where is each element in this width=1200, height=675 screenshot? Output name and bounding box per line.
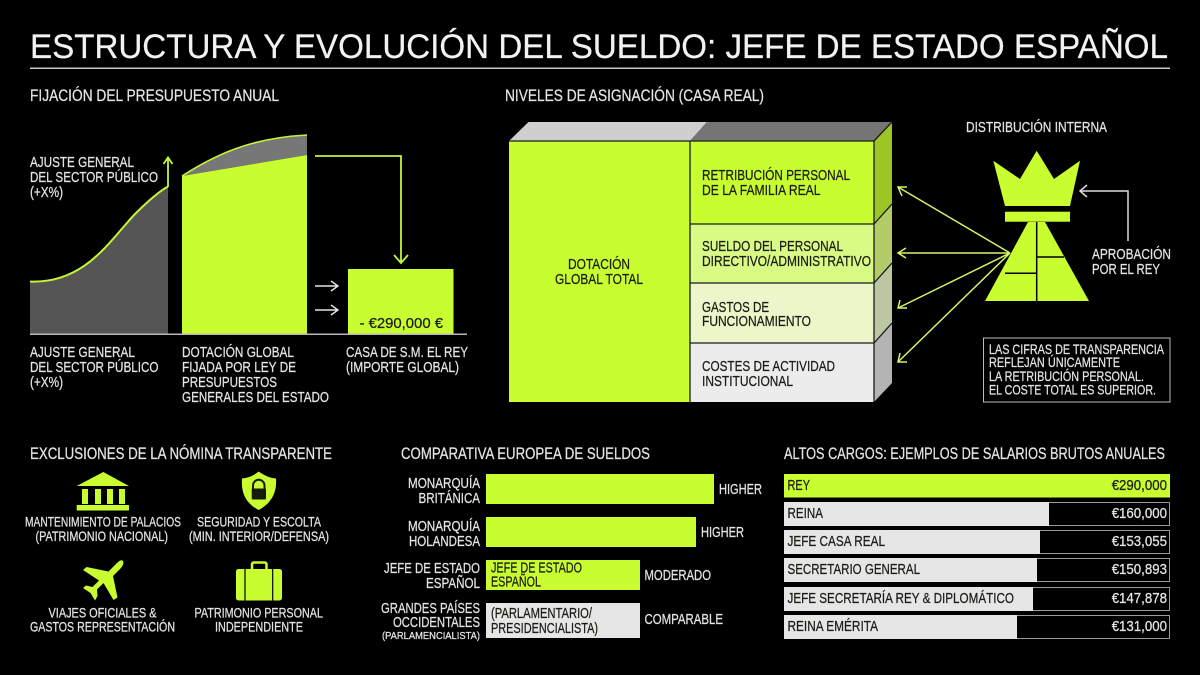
- label: ajuste general upper: DEL SECTOR PÚBLICO: [30, 169, 158, 186]
- row: jefe de estado español: JEFE DE ESTADO: [384, 560, 480, 577]
- row: monarquía británica: MONARQUÍA: [408, 475, 480, 492]
- row: grandes países occidentales: (PARLAMENTARIO/: [491, 605, 593, 622]
- block label: sueldo del personal: SUELDO DEL PERSONAL: [702, 238, 843, 255]
- label: viajes oficiales: GASTOS REPRESENTACIÓN: [30, 619, 175, 635]
- row: jefe secretaría rey: JEFE SECRETARÍA REY & DIPLOMÁTICO: [788, 590, 1014, 607]
- heading: fijación del presupuesto: FIJACIÓN DEL PRESUPUESTO ANUAL: [30, 86, 279, 105]
- block label: retribución personal: DE LA FAMILIA REAL: [702, 182, 820, 199]
- label: seguridad y escolta: SEGURIDAD Y ESCOLTA: [197, 514, 321, 530]
- row: monarquía británica: HIGHER: [719, 481, 762, 498]
- callout: transparency note: REFLEJAN ÚNICAMENTE: [989, 354, 1120, 370]
- 3d block: [509, 122, 892, 402]
- row: monarquía holandesa: HOLANDESA: [409, 533, 480, 550]
- row: jefe secretaría rey: [784, 587, 1170, 611]
- label: ajuste general lower: AJUSTE GENERAL: [30, 344, 135, 361]
- row: reina emérita: €131,000: [1112, 618, 1167, 635]
- row: monarquía holandesa: [408, 517, 744, 550]
- row: monarquía holandesa: MONARQUÍA: [408, 518, 480, 535]
- callout: transparency note: LA RETRIBUCIÓN PERSONAL.: [989, 368, 1144, 384]
- block label: gastos de funcionamiento: FUNCIONAMIENTO: [702, 313, 811, 330]
- block label: sueldo del personal: DIRECTIVO/ADMINISTRATIVO: [702, 253, 871, 270]
- row: reina: [784, 502, 1170, 526]
- label: patrimonio personal: [194, 605, 323, 635]
- label: dotación global: [182, 344, 329, 406]
- row: grandes países occidentales: PRESIDENCIALISTA): [491, 620, 598, 637]
- label: dotación global: PRESUPUESTOS: [182, 374, 277, 391]
- label: ajuste general upper: [30, 154, 158, 201]
- row: jefe secretaría rey: €147,878: [1112, 590, 1167, 607]
- row: jefe de estado español: JEFE DE ESTADO: [491, 560, 582, 577]
- block label: dotación global total: GLOBAL TOTAL: [555, 271, 643, 288]
- label: casa de s.m. el rey: CASA DE S.M. EL REY: [346, 344, 468, 361]
- block label: retribución personal: [702, 167, 850, 199]
- icon: shield with lock: [242, 472, 276, 510]
- row: jefe casa real: €153,055: [1112, 533, 1167, 550]
- row: reina emérita: REINA EMÉRITA: [788, 618, 878, 635]
- row: secretario general: SECRETARIO GENERAL: [788, 561, 920, 578]
- panel: niveles de asignación: [505, 86, 1171, 402]
- label: mantenimiento de palacios: (PATRIMONIO NACIONAL): [36, 528, 168, 544]
- heading: comparativa europea: COMPARATIVA EUROPEA DE SUELDOS: [401, 445, 650, 463]
- label: casa de s.m. el rey: [346, 344, 468, 376]
- row: grandes países occidentales: (PARLAMENCIALISTA): [382, 630, 480, 642]
- block label: dotación global total: [555, 256, 643, 288]
- label: ajuste general lower: DEL SECTOR PÚBLICO: [30, 359, 158, 376]
- row: secretario general: €150,893: [1112, 561, 1167, 578]
- row: rey: REY: [788, 477, 810, 494]
- row: reina emérita: [784, 615, 1170, 639]
- callout: transparency note: [984, 338, 1170, 402]
- label: seguridad y escolta: [189, 514, 329, 544]
- baseline: [30, 334, 467, 335]
- chart: dotación global bar: [182, 135, 307, 334]
- label: casa de s.m. el rey: (IMPORTE GLOBAL): [346, 359, 459, 376]
- panel: altos cargos: [784, 445, 1170, 639]
- panel: exclusiones: [25, 444, 332, 635]
- label: mantenimiento de palacios: MANTENIMIENTO DE PALACIOS: [25, 514, 181, 530]
- heading: niveles de asignación: NIVELES DE ASIGNACIÓN (CASA REAL): [505, 86, 764, 105]
- block label: costes de actividad: INSTITUCIONAL: [702, 373, 793, 390]
- label: patrimonio personal: INDEPENDIENTE: [215, 619, 303, 635]
- label: distribución interna: DISTRIBUCIÓN INTERNA: [966, 119, 1107, 136]
- block label: gastos de funcionamiento: GASTOS DE: [702, 299, 769, 316]
- label: aprobación por el rey: APROBACIÓN: [1092, 246, 1171, 263]
- label: patrimonio personal: PATRIMONIO PERSONAL: [194, 605, 323, 621]
- row: jefe de estado español: MODERADO: [644, 567, 711, 584]
- block label: costes de actividad: [702, 358, 835, 390]
- row: grandes países occidentales: COMPARABLE: [644, 611, 723, 628]
- label: ajuste general upper: AJUSTE GENERAL: [30, 154, 134, 171]
- row: grandes países occidentales: OCCIDENTALES: [393, 614, 480, 631]
- row: jefe de estado español: ESPAÑOL: [491, 574, 541, 591]
- label: aprobación por el rey: [1092, 246, 1171, 278]
- label: aprobación por el rey: POR EL REY: [1092, 261, 1160, 278]
- row: grandes países occidentales: GRANDES PAÍSES: [381, 600, 480, 617]
- arrows: white pair: [315, 281, 338, 315]
- label: seguridad y escolta: (MIN. INTERIOR/DEFENSA): [189, 528, 329, 544]
- label: mantenimiento de palacios: [25, 514, 181, 544]
- row: jefe de estado español: ESPAÑOL: [426, 575, 480, 592]
- row: reina: €160,000: [1112, 505, 1167, 522]
- label: ajuste general lower: (+X%): [30, 374, 63, 391]
- title: ESTRUCTURA Y EVOLUCIÓN DEL SUELDO: JEFE DE ESTADO ESPAÑOL: [30, 27, 1168, 66]
- row: jefe de estado español: [384, 560, 711, 592]
- row: jefe casa real: [784, 530, 1170, 554]
- block label: gastos de funcionamiento: [702, 299, 811, 330]
- row: rey: €290,000: [1112, 477, 1167, 494]
- casa real box: - €290,000 €: [360, 315, 444, 332]
- label: viajes oficiales: VIAJES OFICIALES &: [48, 605, 157, 621]
- row: grandes países occidentales: [381, 600, 723, 642]
- panel: comparativa europea: [381, 445, 762, 642]
- row: monarquía británica: [408, 474, 762, 507]
- row: monarquía holandesa: HIGHER: [701, 524, 744, 541]
- arrows: distribution to block: [898, 187, 1010, 362]
- arrow: bar to casa real: [315, 156, 408, 263]
- block label: retribución personal: RETRIBUCIÓN PERSONAL: [702, 167, 850, 184]
- row: reina: REINA: [788, 505, 823, 522]
- icon: suitcase: [236, 562, 282, 600]
- heading: exclusiones: EXCLUSIONES DE LA NÓMINA TRANSPARENTE: [30, 444, 332, 463]
- label: dotación global: FIJADA POR LEY DE: [182, 359, 296, 376]
- block label: sueldo del personal: [702, 238, 871, 270]
- label: ajuste general lower: [30, 344, 158, 391]
- chart: grey growth curve: [30, 158, 172, 334]
- casa real box: [348, 269, 454, 334]
- label: ajuste general upper: (+X%): [30, 184, 63, 201]
- icon: airplane: [83, 560, 123, 600]
- icon: crown and pyramid: [985, 151, 1089, 301]
- block label: dotación global total: DOTACIÓN: [568, 256, 630, 273]
- arrow: aprobación: [1080, 185, 1128, 241]
- block label: costes de actividad: COSTES DE ACTIVIDAD: [702, 358, 835, 375]
- row: rey: [784, 474, 1170, 498]
- icon: palace: [77, 472, 129, 510]
- row: secretario general: [784, 558, 1170, 582]
- label: viajes oficiales: [30, 605, 175, 635]
- label: dotación global: GENERALES DEL ESTADO: [182, 389, 329, 406]
- label: dotación global: DOTACIÓN GLOBAL: [182, 344, 294, 361]
- row: jefe casa real: JEFE CASA REAL: [788, 533, 885, 550]
- row: monarquía británica: BRITÁNICA: [418, 490, 480, 507]
- panel: fijación del presupuesto anual: [30, 86, 468, 406]
